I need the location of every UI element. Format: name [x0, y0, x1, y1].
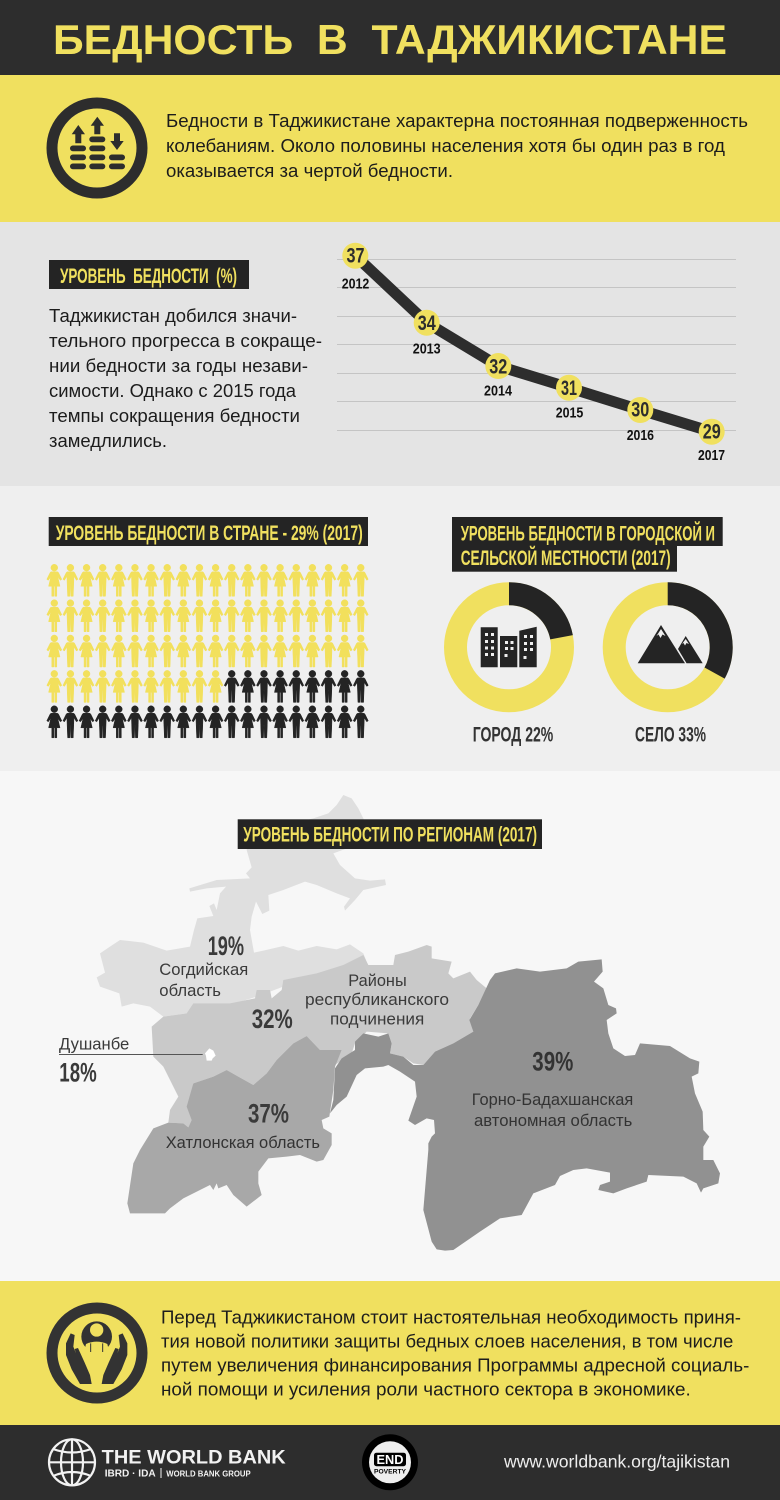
icon: coins with arrows [52, 103, 142, 193]
label: city 22%: ГОРОД 22% [473, 724, 554, 747]
logo: The World Bank: WORLD BANK GROUP [166, 1469, 251, 1479]
line chart: poverty rate 2012-2017: 32 [489, 355, 507, 378]
region: Dushanbe [205, 1048, 216, 1061]
heading: national poverty: УРОВЕНЬ БЕДНОСТИ В СТРАНЕ - 29% (2017) [56, 522, 363, 545]
title: БЕДНОСТЬ В ТАДЖИКИСТАНЕ [53, 16, 727, 63]
region: Gorno-Badakhshan [330, 959, 720, 1251]
text: progress paragraph: симости. Однако с 2015 года [49, 380, 297, 401]
pictogram: 100 people, 29 in poverty [47, 564, 368, 738]
line chart: poverty rate 2012-2017: 2012 [342, 276, 369, 293]
label: Dushanbe 18% [59, 1034, 203, 1088]
line chart: poverty rate 2012-2017: 29 [703, 420, 721, 443]
conclusion text: Перед Таджикистаном стоит настоятельная необходимость приня- [161, 1306, 741, 1327]
line chart: poverty rate 2012-2017: 34 [418, 312, 436, 335]
text: progress paragraph [49, 305, 322, 451]
heading: urban and rural poverty [452, 517, 723, 572]
heading: regional poverty: УРОВЕНЬ БЕДНОСТИ ПО РЕГИОНАМ (2017) [243, 824, 537, 847]
label: Republican Subordination 32%: Районы [348, 971, 407, 990]
label: Republican Subordination 32%: 32% [252, 1004, 293, 1034]
panel: national and urban/rural poverty [0, 486, 780, 771]
line chart: poverty rate 2012-2017: 30 [631, 399, 649, 422]
intro text: Бедности в Таджикистане характерна постоянная подверженность [166, 110, 748, 131]
heading: regional poverty [238, 819, 542, 849]
label: Sughd 19%: область [159, 981, 221, 1000]
conclusion text: ной помощи и усиления роли частного сектора в экономике. [161, 1379, 691, 1400]
label: Gorno-Badakhshan 39% [472, 1047, 633, 1130]
icon: globe [49, 1439, 95, 1485]
label: Gorno-Badakhshan 39%: автономная область [474, 1111, 632, 1130]
label: Dushanbe 18%: 18% [59, 1058, 97, 1088]
label: Gorno-Badakhshan 39%: 39% [532, 1047, 573, 1077]
panel: poverty rate [0, 222, 780, 486]
line chart: poverty rate 2012-2017: 2013 [413, 340, 441, 357]
logo: End Poverty: POVERTY [374, 1468, 407, 1475]
label: Dushanbe 18%: Душанбе [59, 1034, 129, 1053]
logo: The World Bank [49, 1439, 286, 1485]
panel: regional poverty [0, 771, 780, 1281]
text: progress paragraph: Таджикистан добился значи- [49, 305, 297, 326]
panel: introduction [0, 75, 780, 222]
intro text [166, 110, 748, 181]
icon: city buildings [481, 627, 537, 667]
conclusion text: путем увеличения финансирования Программы адресной социаль- [161, 1355, 749, 1376]
label: Khatlon 37%: 37% [248, 1099, 289, 1129]
icon: mountains [638, 625, 703, 663]
label: Khatlon 37% [166, 1099, 320, 1152]
conclusion text: тия новой политики защиты бедных слоев населения, в том числе [161, 1331, 733, 1352]
intro text: колебаниям. Около половины населения хотя бы один раз в год [166, 135, 725, 156]
line chart: poverty rate 2012-2017: 37 [346, 245, 364, 268]
line chart: poverty rate 2012-2017: 2016 [627, 427, 654, 444]
conclusion text [161, 1306, 749, 1400]
label: village 33%: СЕЛО 33% [635, 724, 706, 747]
label: Sughd 19%: 19% [208, 931, 244, 961]
label: Republican Subordination 32%: подчинения [330, 1009, 424, 1028]
label: Sughd 19%: Согдийская [159, 960, 248, 979]
region: Khatlon [127, 1036, 342, 1213]
text: progress paragraph: нии бедности за годы незави- [49, 355, 308, 376]
label: Republican Subordination 32%: республиканского [305, 990, 449, 1009]
panel: header [0, 0, 780, 75]
line chart: poverty rate 2012-2017 [337, 243, 736, 464]
logo: The World Bank: IBRD · IDA [105, 1468, 156, 1480]
heading: poverty rate [49, 260, 249, 289]
heading: poverty rate: УРОВЕНЬ БЕДНОСТИ (%) [60, 265, 237, 288]
line chart: poverty rate 2012-2017: 2015 [556, 405, 583, 422]
intro text: оказывается за чертой бедности. [166, 160, 453, 181]
heading: urban and rural poverty: СЕЛЬСКОЙ МЕСТНОСТИ (2017) [461, 546, 671, 570]
logo: The World Bank: THE WORLD BANK [102, 1446, 286, 1468]
icon: hands protecting person [52, 1308, 142, 1398]
line chart: poverty rate 2012-2017: 2017 [698, 447, 725, 464]
website link: www.worldbank.org/tajikistan [503, 1452, 730, 1472]
logo: End Poverty: END [376, 1453, 404, 1467]
label: Republican Subordination 32% [252, 971, 449, 1034]
line chart: poverty rate 2012-2017: 31 [561, 377, 577, 400]
text: progress paragraph: тельного прогресса в сокраще- [49, 330, 322, 351]
region: Districts of Republican Subordination [152, 945, 487, 1127]
label: Sughd 19% [159, 931, 248, 1000]
text: progress paragraph: замедлились. [49, 430, 167, 451]
map: Tajikistan regions [97, 795, 720, 1251]
heading: national poverty [49, 517, 368, 546]
donut chart: village 33% [614, 594, 721, 701]
panel: footer [0, 1425, 780, 1500]
label: Gorno-Badakhshan 39%: Горно-Бадахшанская [472, 1090, 633, 1109]
region: Sughd [97, 795, 386, 1017]
line chart: poverty rate 2012-2017: 2014 [484, 383, 513, 400]
label: Khatlon 37%: Хатлонская область [166, 1133, 320, 1152]
text: progress paragraph: темпы сокращения бедности [49, 405, 300, 426]
donut chart: city 22% [456, 594, 562, 701]
panel: conclusion [0, 1281, 780, 1425]
logo: End Poverty [362, 1434, 418, 1490]
